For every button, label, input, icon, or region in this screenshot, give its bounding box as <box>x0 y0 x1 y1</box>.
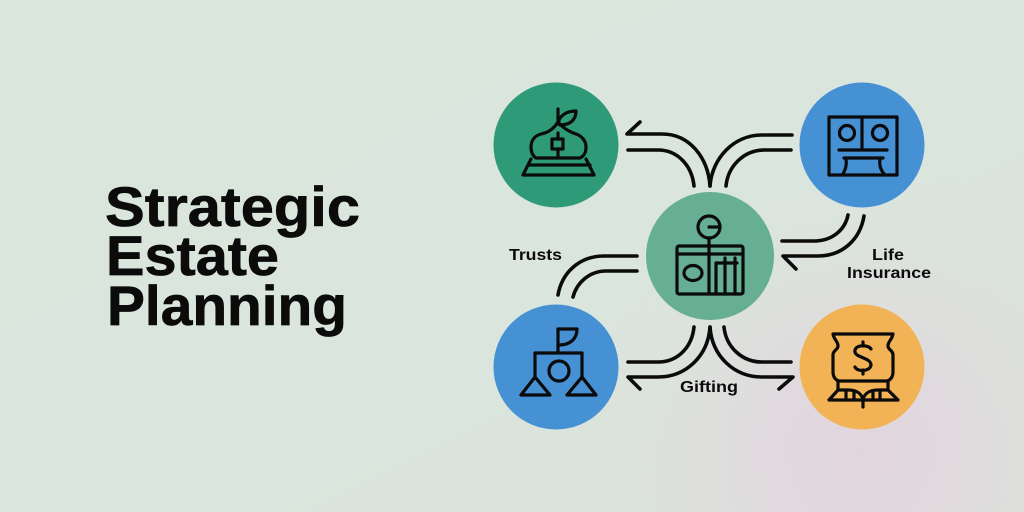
node: blue circle with window icon <box>800 82 924 208</box>
arrow: blue circle to hub <box>710 135 792 186</box>
title: Strategic <box>105 175 360 238</box>
label: Life Insurance: Insurance <box>847 265 931 282</box>
arrow: hub to green circle <box>627 122 710 186</box>
arrow: trusts connector <box>558 256 637 297</box>
node: green circle with plant icon <box>494 82 618 208</box>
node: center hub with chart icon <box>646 192 774 320</box>
title <box>105 175 360 337</box>
node: orange circle with money pot icon <box>800 304 924 430</box>
label: Trusts: Trusts <box>509 247 562 264</box>
node: blue circle with scales icon <box>494 304 618 430</box>
arrows: connectors between center hub and circles <box>558 122 864 389</box>
arrow: top right circle to hub <box>782 215 864 269</box>
label: Gifting: Gifting <box>680 379 738 396</box>
arrow: hub to orange circle <box>710 327 793 389</box>
title: Estate <box>106 224 279 287</box>
label: Life Insurance: Life <box>872 247 904 264</box>
arrow: hub to lower left circle <box>628 327 710 389</box>
title: Planning <box>107 274 347 337</box>
label: Life Insurance <box>847 247 931 282</box>
